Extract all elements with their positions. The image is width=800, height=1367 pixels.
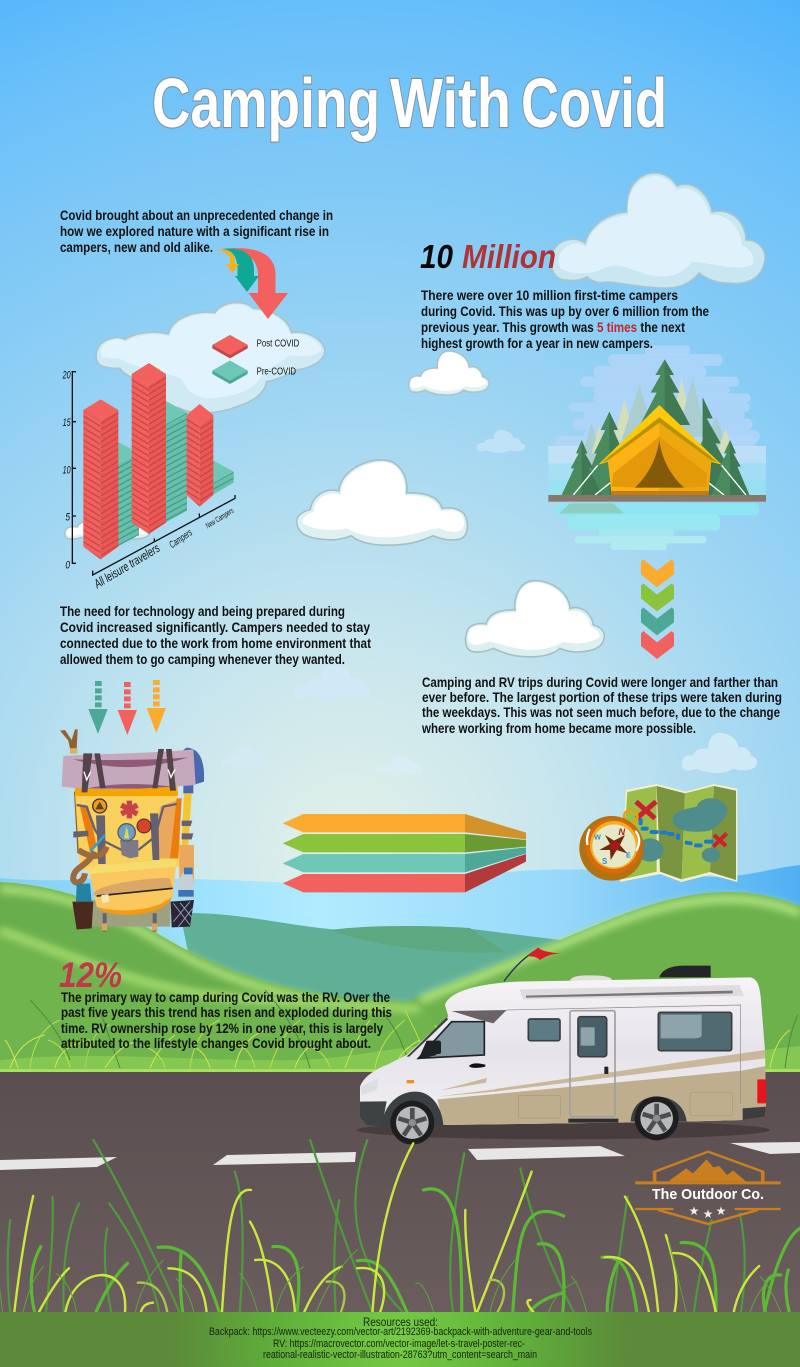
technology text: connected due to the work from home environment that	[60, 636, 371, 651]
resources credits: RV: https://macrovector.com/vector-image/let-s-travel-poster-rec-	[273, 1338, 525, 1350]
compass: S	[602, 857, 608, 866]
treasure map and compass	[579, 784, 737, 882]
distant teal hills	[180, 913, 560, 1010]
logo stars	[689, 1204, 726, 1221]
cloud: faint left of tech text	[294, 665, 370, 700]
legend: Pre-COVID	[257, 366, 296, 377]
isometric bar chart	[62, 335, 299, 592]
RV text	[61, 990, 392, 1051]
foreground grass	[0, 1140, 800, 1312]
bars: pre-covid all leisure	[96, 442, 139, 547]
RV illustration	[357, 947, 770, 1145]
technology text: Covid increased significantly. Campers needed to stay	[60, 620, 370, 635]
resources credits: reational-realistic-vector-illustration-28763?utm_content=search_main	[263, 1349, 537, 1361]
cloud: faint sky	[477, 430, 525, 453]
door	[568, 1011, 618, 1123]
cloud: faint centre	[377, 755, 422, 775]
RV text: attributed to the lifestyle changes Covid brought about.	[61, 1036, 371, 1051]
cloud: small white	[409, 351, 489, 395]
x axis: All leisure travelers	[91, 541, 163, 592]
front green hill	[0, 925, 470, 1072]
badges	[93, 799, 151, 841]
title	[152, 64, 667, 142]
compass: E	[626, 850, 631, 859]
heading: 10 Million	[420, 238, 556, 275]
intro text: how we explored nature with a significant rise in	[60, 224, 329, 239]
technology text	[60, 604, 371, 667]
tail light	[757, 1079, 766, 1103]
trips text	[421, 675, 782, 736]
10 million text: There were over 10 million first-time campers	[421, 288, 678, 303]
body stripes	[437, 1050, 765, 1097]
x axis: New Campers	[204, 506, 235, 530]
y axis: 0	[65, 560, 70, 572]
10 million text	[421, 288, 709, 351]
flag	[504, 947, 561, 981]
faded trees	[577, 378, 733, 473]
logo name: The Outdoor Co.	[652, 1186, 764, 1203]
10 million text: highest growth for a year in new campers.	[421, 336, 653, 351]
intro text: Covid brought about an unprecedented change in	[60, 208, 333, 223]
tent body	[598, 405, 722, 495]
cloud: legend backdrop	[96, 302, 325, 413]
logo stars: ★	[716, 1204, 726, 1218]
tent guy lines	[573, 465, 746, 495]
tent illustration	[548, 345, 766, 659]
bars: pre-covid new campers	[191, 460, 234, 495]
trips text: where working from home became more possible.	[421, 721, 696, 736]
logo emblem	[635, 1152, 781, 1224]
stick and shovel	[60, 729, 204, 852]
lower tan panel	[437, 1066, 766, 1125]
rope	[73, 847, 107, 883]
cloud: top right	[551, 173, 765, 288]
logo stars: ★	[689, 1204, 699, 1218]
backdrop stripes	[555, 345, 760, 447]
resources credits: Resources used:	[363, 1315, 438, 1329]
x axis: Campers	[168, 528, 195, 551]
technology text: The need for technology and being prepared during	[60, 604, 345, 619]
rear wheel	[631, 1096, 687, 1140]
water reflection	[556, 503, 759, 550]
roof overhang and awning	[452, 985, 744, 1103]
intro text	[60, 208, 333, 255]
left green hill	[0, 882, 420, 1072]
technology text: allowed them to go camping whenever they wanted.	[60, 652, 345, 667]
logo: The Outdoor Co.	[635, 1152, 781, 1224]
intro text: campers, new and old alike.	[60, 240, 213, 255]
cloud: centre white	[297, 460, 467, 545]
ground	[548, 495, 766, 502]
resources credits: Backpack: https://www.vecteezy.com/vector-art/2192369-backpack-with-adventure-gear-and-tools	[209, 1326, 592, 1338]
y axis: 20	[62, 370, 71, 382]
y axis: 15	[63, 417, 71, 429]
cloud: small white behind chart	[65, 508, 150, 541]
footer bar	[0, 1312, 800, 1367]
windows	[407, 1012, 732, 1059]
body	[73, 785, 194, 893]
heading: 10 Million: 10	[420, 238, 454, 275]
logo stars: ★	[703, 1207, 713, 1221]
chevrons	[641, 559, 674, 659]
bars: post-covid new campers	[187, 404, 213, 507]
dashed arrows	[88, 680, 166, 735]
side compartments	[518, 1093, 733, 1118]
cab details	[360, 1063, 485, 1126]
distant water band	[0, 865, 800, 1010]
right green hill	[400, 892, 800, 1072]
bars: post-covid campers	[132, 363, 166, 534]
sleeping roll	[62, 749, 196, 792]
icon: curved arrows	[216, 248, 288, 319]
road	[0, 1072, 800, 1313]
legend	[212, 335, 299, 384]
RV body	[360, 977, 766, 1125]
cloud: faint right	[682, 733, 757, 773]
road shadow	[357, 1121, 770, 1139]
10 million text: previous year. This growth was 5 times the next	[421, 320, 685, 335]
RV text: The primary way to camp during Covid was the RV. Over the	[61, 990, 390, 1005]
RV text: past five years this trend has risen and exploded during this	[61, 1005, 392, 1020]
title: With	[390, 64, 511, 142]
compass: N	[618, 827, 625, 837]
lawn grass	[5, 990, 798, 1068]
backpack illustration	[60, 680, 204, 932]
road markings	[0, 1142, 800, 1170]
compass	[579, 810, 644, 881]
horizon bands	[548, 446, 766, 495]
y axis: 10	[63, 464, 71, 476]
layered ribbon arrows	[283, 814, 526, 892]
heading: 12%: 12%	[59, 956, 122, 995]
pine trees	[562, 359, 749, 495]
x axis	[91, 495, 235, 592]
bars: post-covid all leisure	[83, 399, 118, 559]
10 million text: during Covid. This was up by over 6 million from the	[421, 304, 709, 319]
legend: Post COVID	[257, 339, 299, 350]
RV text: time. RV ownership rose by 12% in one year, this is largely	[61, 1021, 383, 1036]
rear lower trim	[743, 1107, 766, 1120]
front wheel	[382, 1092, 443, 1145]
cloud: lower right white	[466, 581, 604, 657]
title: Covid	[521, 64, 667, 142]
cloud: faint by backpack	[222, 745, 267, 768]
compass: W	[594, 832, 601, 841]
map	[620, 784, 737, 882]
lawn strip	[0, 1045, 800, 1072]
y axis	[62, 370, 76, 572]
roof fittings	[570, 966, 711, 981]
heading: 10 Million: Million	[462, 238, 556, 275]
title: Camping	[152, 64, 380, 142]
resources credits	[209, 1315, 592, 1361]
bars: pre-covid campers	[145, 401, 187, 522]
y axis: 5	[65, 512, 70, 524]
front pocket and baskets	[72, 858, 194, 932]
